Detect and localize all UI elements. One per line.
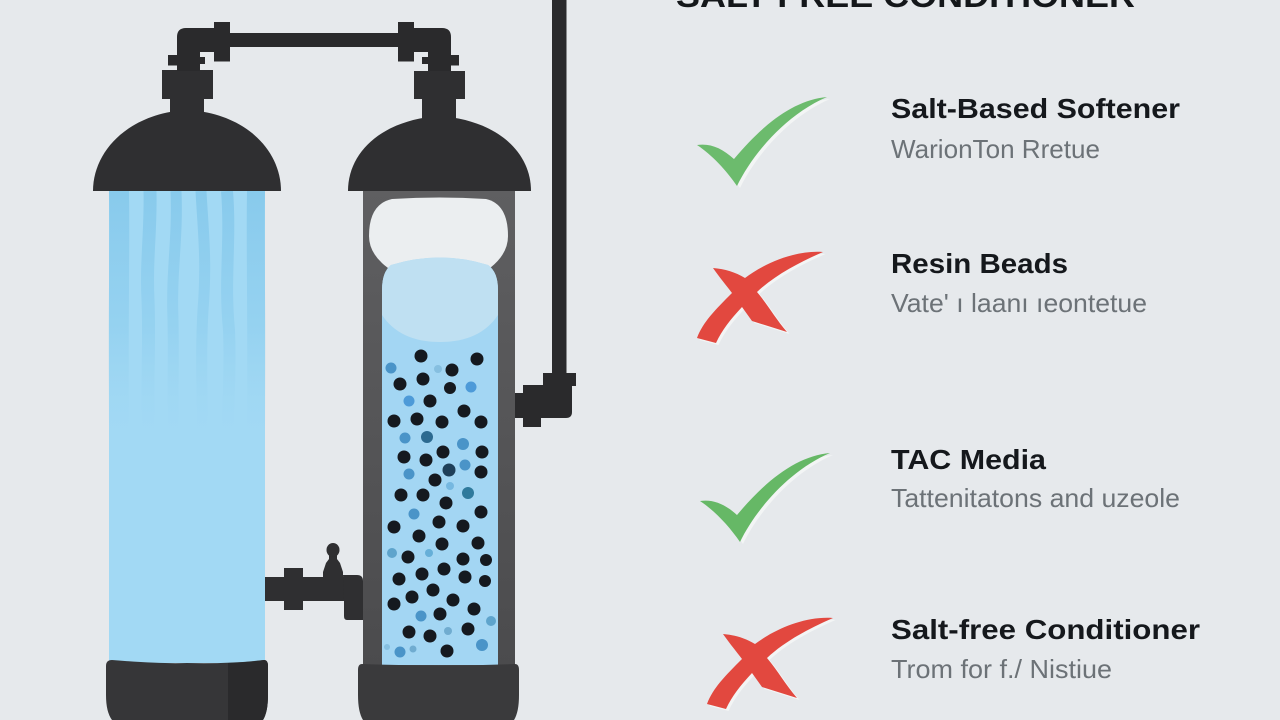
left tank base cap — [106, 660, 268, 720]
right elbow fitting — [398, 22, 459, 71]
black resin beads — [388, 350, 492, 658]
icon: red cross — [707, 618, 836, 711]
left tank — [93, 70, 281, 720]
heading: TAC media: TAC Media — [891, 444, 1046, 475]
right tank base cap — [358, 664, 519, 720]
list item: TAC media — [700, 444, 1180, 544]
list item: salt-based softener — [697, 93, 1180, 188]
description text: Vate' ı laanı ıeontetue — [891, 288, 1147, 318]
right tank white air pocket — [369, 198, 508, 268]
heading: salt-based softener: Salt-Based Softener — [891, 93, 1180, 124]
right tank — [348, 71, 531, 720]
description text: Trom for f./ Nistiue — [891, 654, 1112, 684]
description text: WarionTon Rretue — [891, 134, 1100, 164]
blue media beads — [384, 362, 496, 658]
icon: green check — [700, 453, 833, 544]
heading: resin beads: Resin Beads — [891, 248, 1068, 279]
top connecting pipe — [168, 22, 459, 71]
description text: Tattenitatons and uzeole — [891, 483, 1180, 513]
right tank dome and neck — [348, 71, 531, 191]
outlet pipe and elbow — [515, 0, 576, 427]
left tank water body — [109, 191, 265, 663]
right tank water column — [382, 258, 498, 665]
list item: resin beads — [697, 248, 1147, 345]
heading: salt-free conditioner: Salt-free Conditioner — [891, 614, 1200, 645]
icon: red cross — [697, 252, 826, 345]
list item: salt-free conditioner — [707, 614, 1200, 711]
left elbow fitting — [168, 22, 230, 71]
right tank shell — [363, 190, 515, 666]
left tank dome and neck — [93, 70, 281, 191]
connecting valve — [265, 543, 363, 620]
icon: green check — [697, 97, 830, 188]
right tank light water lens — [382, 258, 498, 342]
